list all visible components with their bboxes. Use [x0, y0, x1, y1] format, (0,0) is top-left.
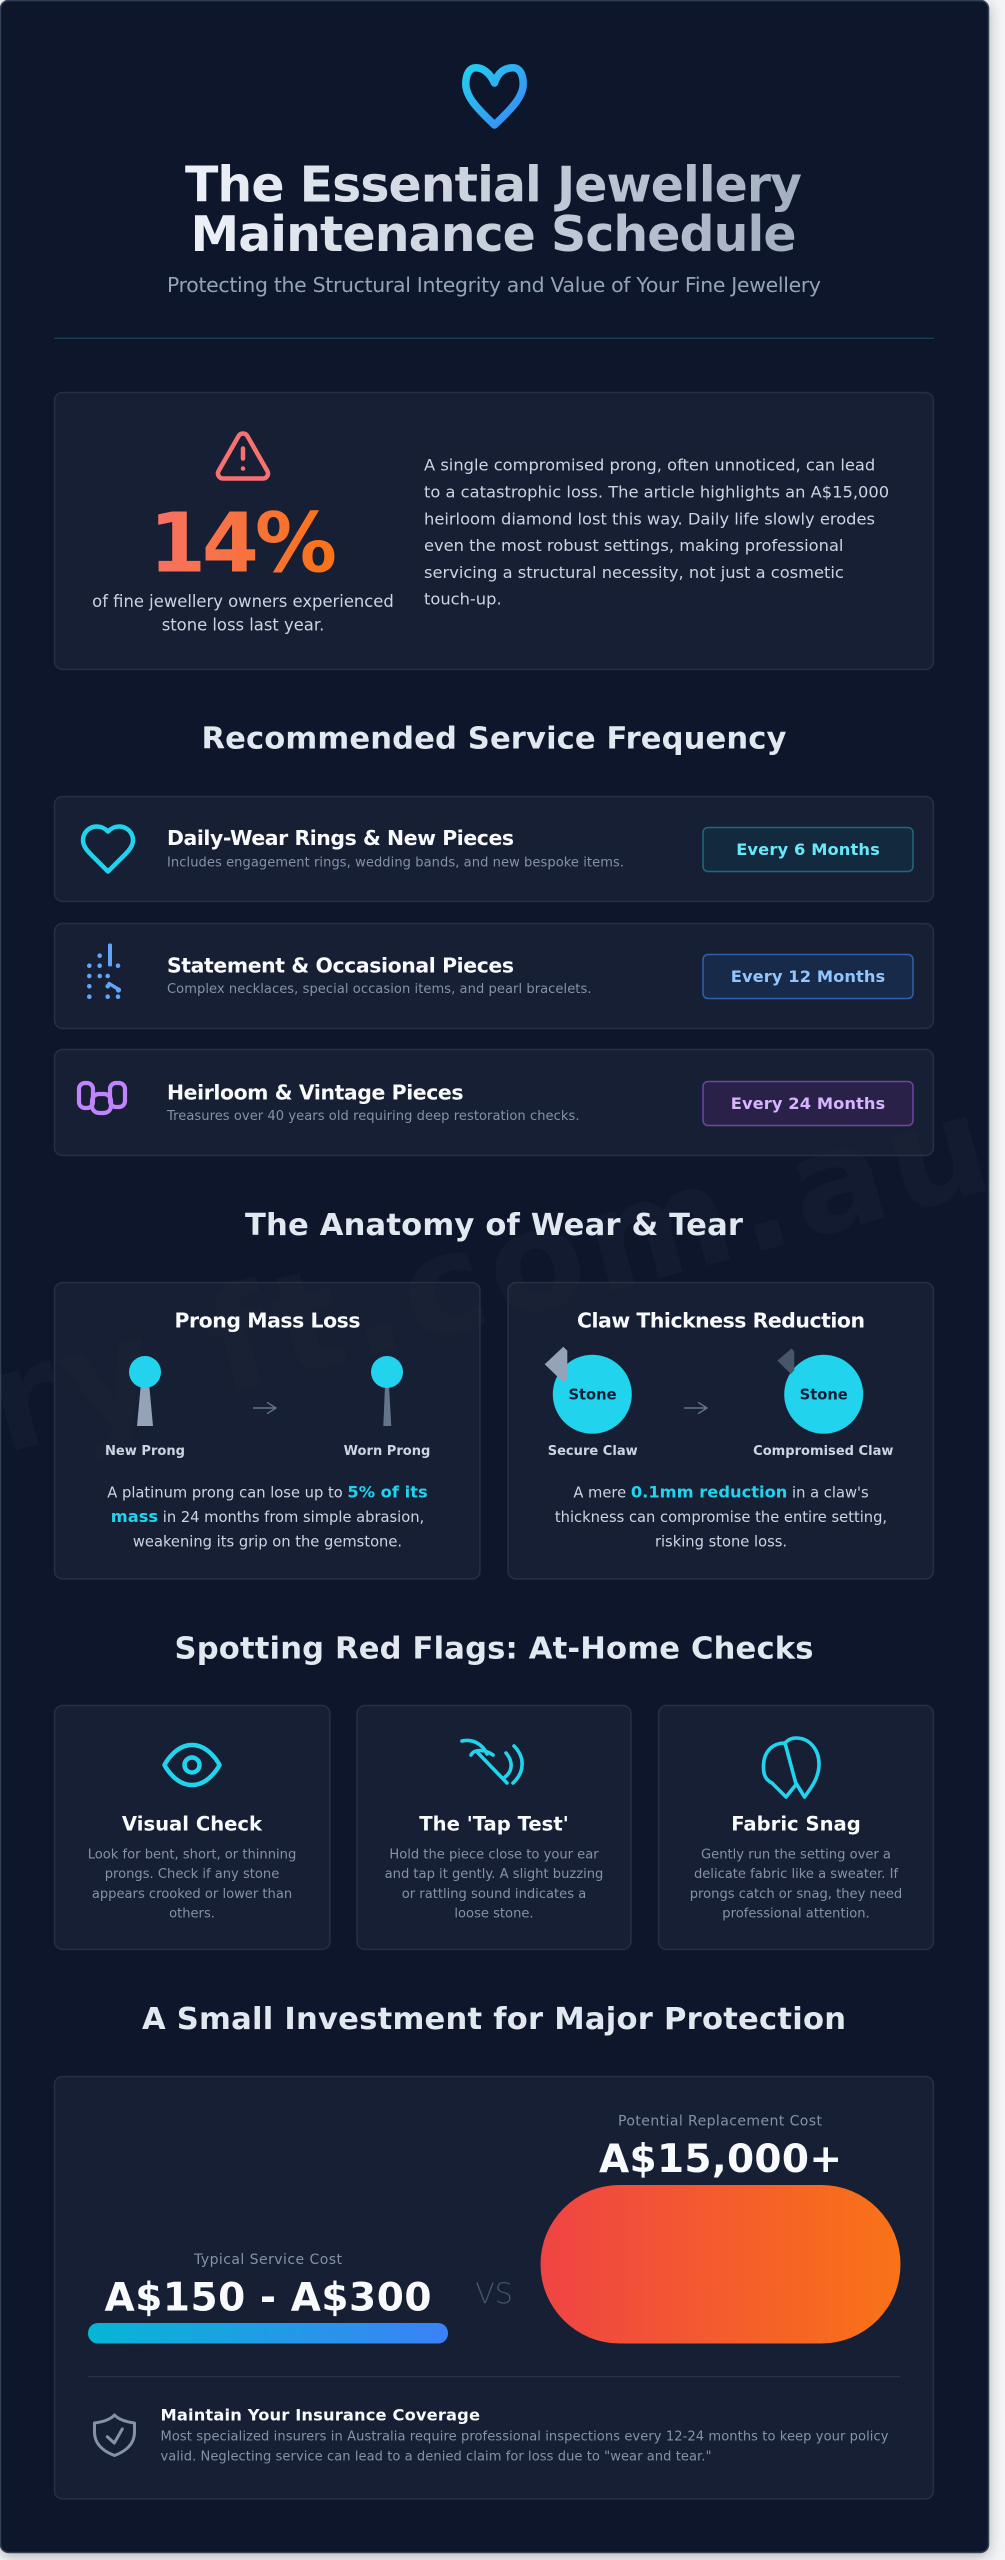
bar: service cost — [88, 2323, 448, 2344]
card title: Prong Mass Loss — [174, 1309, 360, 1333]
icon: header heart — [466, 68, 523, 125]
panel: 14% statistic and intro — [54, 392, 934, 670]
insurance heading: Maintain Your Insurance Coverage — [160, 2406, 480, 2425]
arrow — [684, 1402, 707, 1414]
header — [167, 68, 821, 297]
row description: Includes engagement rings, wedding bands, and new bespoke items. — [167, 856, 624, 871]
value: service cost: A$150 - A$300 — [104, 2276, 432, 2321]
explanatory text: risking stone loss. — [655, 1534, 787, 1551]
panel: visual check — [54, 1706, 330, 1950]
label: Worn Prong — [344, 1444, 430, 1459]
card text: prongs catch or snag, they need — [690, 1887, 902, 1902]
icon: chain links — [79, 1083, 125, 1113]
card title: Visual Check — [122, 1813, 263, 1836]
insurance text: valid. Neglecting service can lead to a denied claim for loss due to "wear and tear." — [160, 2450, 712, 2465]
title: Maintenance Schedule — [190, 206, 796, 263]
panel: tap test — [357, 1706, 631, 1950]
panel: heirloom pieces row — [54, 1050, 934, 1156]
intro paragraph: heirloom diamond lost this way. Daily life slowly erodes — [424, 509, 875, 528]
explanatory text: mass in 24 months from simple abrasion, — [111, 1507, 424, 1526]
heading: service frequency: Recommended Service Frequency — [202, 721, 787, 756]
label: Secure Claw — [548, 1444, 638, 1459]
diagram: secure claw and stone — [545, 1347, 632, 1434]
card text: Hold the piece close to your ear — [389, 1847, 599, 1862]
explanatory text: thickness can compromise the entire setting, — [555, 1509, 887, 1526]
row title: Heirloom & Vintage Pieces — [167, 1080, 464, 1104]
card text: appears crooked or lower than — [92, 1887, 292, 1902]
badge: every 12 months — [703, 954, 913, 998]
card text: prongs. Check if any stone — [105, 1867, 279, 1882]
card title: Fabric Snag — [731, 1813, 861, 1836]
panel: cost comparison and insurance — [54, 2076, 934, 2499]
panel: daily-wear rings row — [54, 796, 934, 902]
vs label: VS — [475, 2278, 513, 2311]
icon: heart — [83, 826, 133, 872]
stat: 14%: 14% — [149, 496, 337, 592]
subtitle: Protecting the Structural Integrity and Value of Your Fine Jewellery — [167, 273, 821, 297]
icon: fabric snag — [763, 1738, 819, 1797]
explanatory text: A platinum prong can lose up to 5% of its — [107, 1483, 428, 1502]
row title: Statement & Occasional Pieces — [167, 953, 514, 977]
row title: Daily-Wear Rings & New Pieces — [167, 826, 514, 850]
card text: delicate fabric like a sweater. If — [694, 1867, 898, 1882]
badge: every 24 months — [703, 1082, 913, 1126]
icon: warning triangle — [218, 433, 268, 479]
arrow — [253, 1402, 276, 1414]
card text: Look for bent, short, or thinning — [88, 1847, 296, 1862]
diagram: worn prong — [371, 1356, 403, 1426]
stat caption: of fine jewellery owners experienced — [92, 592, 394, 611]
panel: fabric snag — [658, 1706, 934, 1950]
intro paragraph: A single compromised prong, often unnoticed, can lead — [424, 456, 875, 475]
intro paragraph: even the most robust settings, making professional — [424, 536, 843, 555]
label: Compromised Claw — [753, 1444, 893, 1459]
icon: tapping finger with sound waves — [462, 1741, 522, 1783]
badge: every 12 months: Every 12 Months — [731, 967, 885, 986]
card text: loose stone. — [454, 1907, 534, 1922]
label: replacement cost: Potential Replacement Cost — [618, 2114, 822, 2130]
diagram: compromised claw and stone: Stone — [800, 1386, 848, 1403]
card text: and tap it gently. A slight buzzing — [385, 1867, 603, 1882]
intro paragraph: servicing a structural necessity, not just a cosmetic — [424, 563, 844, 582]
diagram: compromised claw and stone — [777, 1348, 863, 1434]
card title: Claw Thickness Reduction — [577, 1309, 865, 1333]
icon: shield with check — [94, 2415, 134, 2456]
heading: investment: A Small Investment for Major Protection — [142, 2002, 846, 2037]
insurance text: Most specialized insurers in Australia require professional inspections every 12-24 months to keep your policy — [160, 2430, 889, 2445]
heading: red flags: Spotting Red Flags: At-Home Checks — [174, 1631, 814, 1666]
icon: dotted necklace — [87, 944, 121, 999]
heading: anatomy: The Anatomy of Wear & Tear — [245, 1208, 743, 1243]
label: New Prong — [105, 1444, 185, 1459]
diagram: new prong — [129, 1356, 161, 1426]
panel: statement pieces row — [54, 924, 934, 1028]
bar: replacement cost — [540, 2185, 900, 2344]
badge: every 6 months: Every 6 Months — [736, 840, 880, 859]
diagram: secure claw and stone: Stone — [568, 1386, 617, 1403]
card text: Gently run the setting over a — [701, 1847, 891, 1862]
intro paragraph: touch-up. — [424, 590, 502, 609]
card text: or rattling sound indicates a — [402, 1887, 586, 1902]
icon: eye — [164, 1745, 220, 1785]
row description: Treasures over 40 years old requiring deep restoration checks. — [166, 1109, 580, 1124]
badge: every 6 months — [703, 828, 913, 872]
panel: claw thickness reduction — [508, 1282, 934, 1579]
card title: The 'Tap Test' — [419, 1813, 569, 1836]
card text: others. — [169, 1907, 215, 1922]
stat caption: stone loss last year. — [162, 616, 324, 634]
explanatory text: weakening its grip on the gemstone. — [133, 1534, 402, 1551]
label: service cost: Typical Service Cost — [193, 2252, 342, 2268]
card text: professional attention. — [722, 1907, 870, 1922]
explanatory text: A mere 0.1mm reduction in a claw's — [573, 1483, 869, 1502]
row description: Complex necklaces, special occasion items, and pearl bracelets. — [167, 982, 592, 997]
badge: every 24 months: Every 24 Months — [731, 1094, 885, 1113]
intro paragraph: to a catastrophic loss. The article highlights an A$15,000 — [424, 482, 889, 502]
panel: prong mass loss — [54, 1282, 480, 1579]
value: replacement cost: A$15,000+ — [599, 2137, 842, 2182]
title: The Essential Jewellery — [185, 156, 802, 214]
